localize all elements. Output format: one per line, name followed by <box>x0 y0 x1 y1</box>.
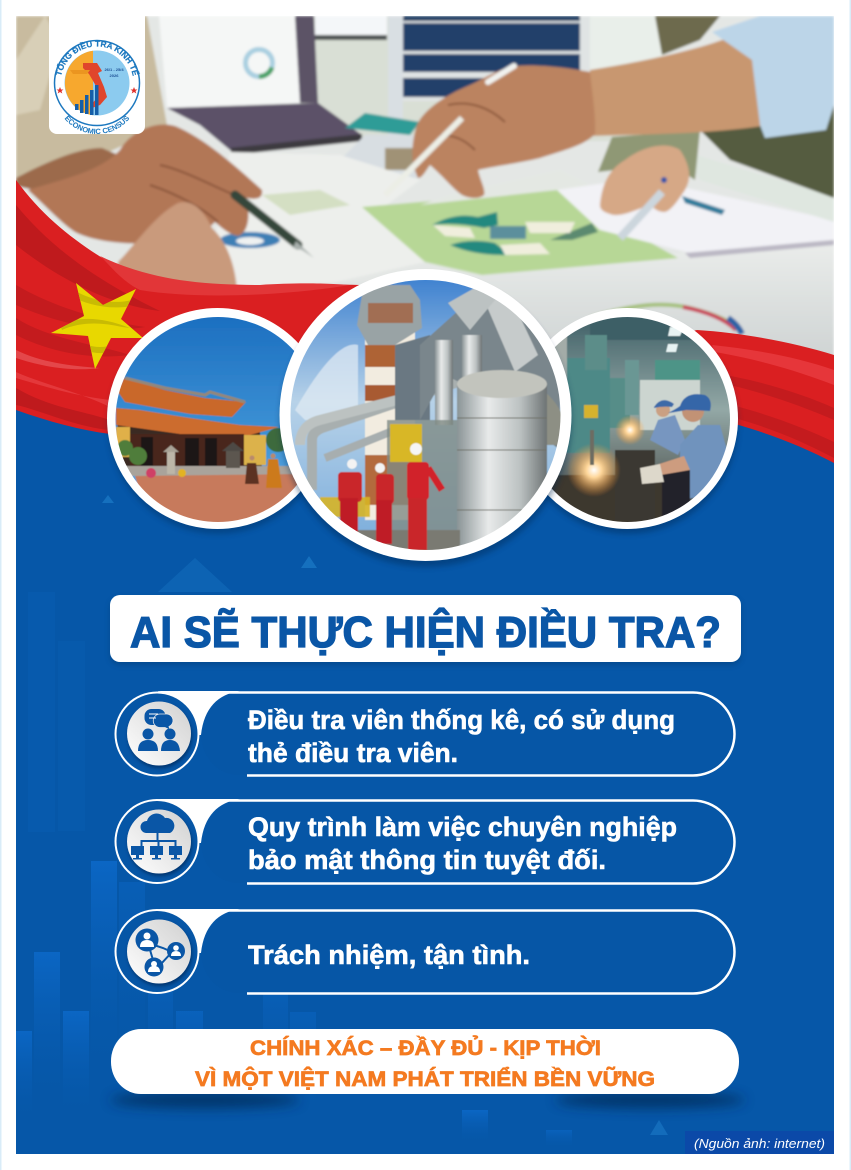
row 1: survey staff <box>114 691 734 776</box>
yellow star <box>51 283 145 369</box>
table papers <box>210 152 425 290</box>
photo: team reviewing ESG reports <box>16 16 834 366</box>
faint chart bars and arrows <box>16 495 668 1154</box>
logo card <box>49 16 145 134</box>
left person <box>16 16 167 178</box>
right circle: factory photo <box>546 308 742 536</box>
census logo: 26/1 - 25/4 <box>104 67 124 72</box>
census logo <box>54 40 140 134</box>
text: row 2: bảo mật thông tin tuyệt đối. <box>248 845 606 875</box>
right person <box>655 16 720 55</box>
icon: chat and two people <box>138 709 180 751</box>
slogan text <box>195 1036 655 1091</box>
text: row 2: Quy trình làm việc chuyên nghiệp <box>248 812 677 842</box>
blue background <box>16 410 834 1154</box>
slogan banner <box>110 1029 745 1108</box>
icon: cloud network <box>131 814 182 860</box>
census logo: ECONOMIC CENSUS <box>64 116 129 134</box>
slogan text: CHÍNH XÁC – ĐẦY ĐỦ - KỊP THỜI <box>250 1036 601 1060</box>
text: row 1 <box>248 708 674 762</box>
text: row 1: Điều tra viên thống kê, có sử dụng <box>248 705 675 735</box>
title: AI SẼ THỰC HIỆN ĐIỀU TRA? <box>130 607 721 657</box>
census logo: TỔNG ĐIỀU TRA KINH TẾ <box>56 41 140 76</box>
row 3: responsibility <box>114 909 734 994</box>
title banner <box>110 595 741 665</box>
text: row 2 <box>248 812 677 875</box>
paper graphics <box>432 212 498 228</box>
image source note <box>685 1131 834 1154</box>
image source note: (Nguồn ảnh: internet) <box>694 1136 825 1151</box>
centre circle: refinery photo <box>280 269 572 567</box>
left circle: temple photo <box>105 308 303 536</box>
text: row 1: thẻ điều tra viên. <box>248 738 458 768</box>
slogan text: VÌ MỘT VIỆT NAM PHÁT TRIỂN BỀN VỮNG <box>195 1067 655 1091</box>
row 2: professional process <box>114 799 734 884</box>
red flag wave <box>16 180 834 480</box>
text: row 3: Trách nhiệm, tận tình. <box>248 940 530 970</box>
icon: people network <box>136 928 185 976</box>
census logo: 2026 <box>110 73 119 78</box>
